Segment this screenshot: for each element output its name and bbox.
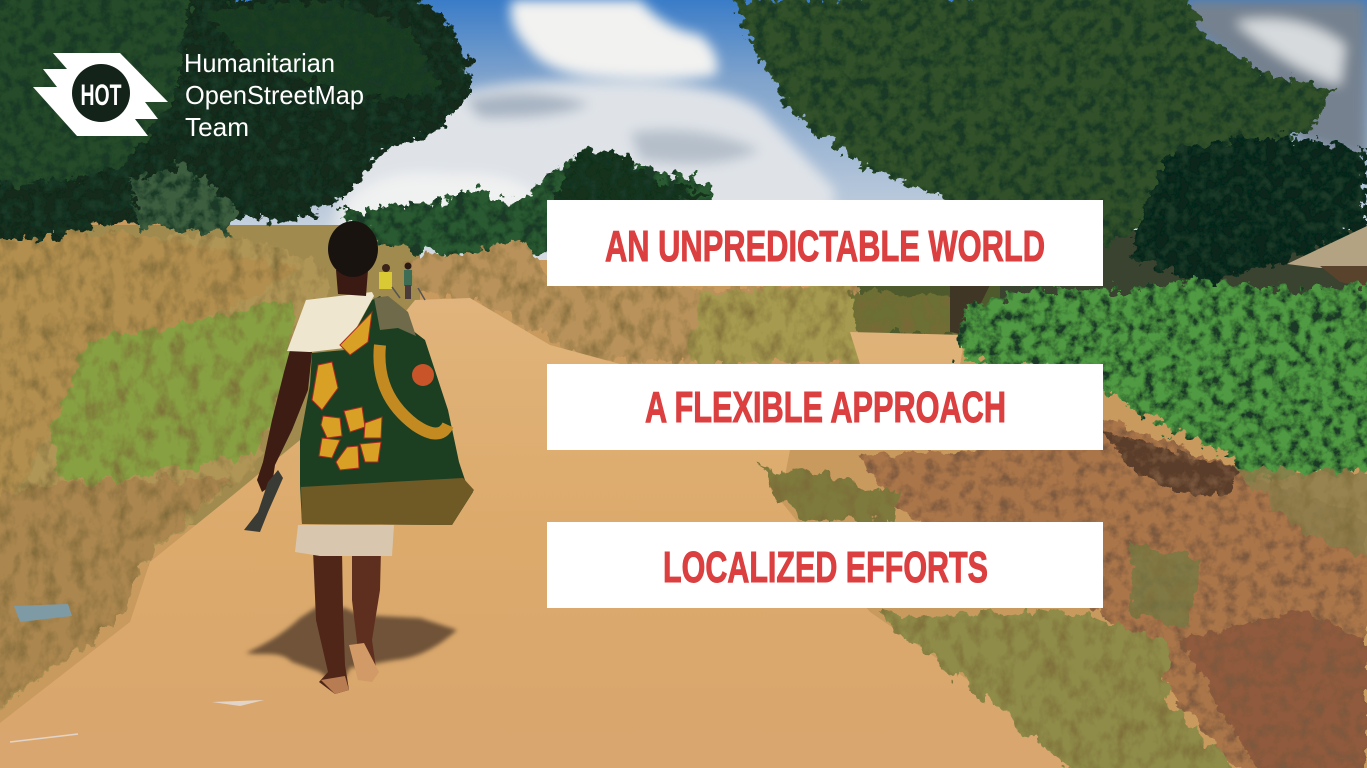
cloth pattern medallion — [379, 345, 448, 434]
mounds of red soil — [860, 415, 1367, 768]
logo mark — [33, 53, 168, 136]
logo circle — [72, 64, 130, 122]
ground base behind vegetation — [0, 225, 1367, 525]
left roadside grass — [0, 225, 330, 715]
right big tree canopy — [732, 0, 1367, 285]
panel: localized efforts — [547, 522, 1103, 608]
left tree canopy — [0, 0, 475, 240]
panel: a flexible approach — [547, 364, 1103, 450]
HOT logo — [33, 48, 364, 142]
road — [0, 298, 1095, 768]
organisation name: OpenStreetMap — [185, 80, 364, 110]
tree trunk and thatched hut — [950, 226, 1367, 335]
skirt — [295, 525, 394, 556]
tool in hand — [244, 470, 283, 532]
distant figures with bicycle — [379, 262, 425, 300]
left arm and hand — [257, 350, 312, 492]
girl's shadow on the road — [246, 605, 457, 688]
small litter on the road edge — [10, 604, 264, 742]
panel: a flexible approach: A FLEXIBLE APPROACH — [645, 383, 1006, 432]
girl walking — [244, 221, 474, 694]
cassava field — [960, 280, 1367, 480]
panel: an unpredictable world: AN UNPREDICTABLE WORLD — [605, 222, 1045, 271]
organisation name — [184, 48, 364, 142]
legs and feet — [313, 550, 381, 694]
green wrap cloth — [300, 296, 473, 525]
logo letters: HOT — [80, 79, 122, 112]
yellow petals — [312, 312, 382, 470]
panel: an unpredictable world — [547, 200, 1103, 286]
white shirt — [287, 292, 374, 352]
patterned hem — [301, 478, 474, 525]
sky with clouds — [180, 0, 1367, 260]
far field grass — [405, 240, 960, 365]
head — [328, 221, 378, 296]
roadside weeds — [755, 465, 1367, 768]
organisation name: Team — [185, 112, 249, 142]
panel: localized efforts: LOCALIZED EFFORTS — [663, 543, 988, 592]
distant tree line — [340, 148, 712, 262]
organisation name: Humanitarian — [184, 48, 335, 78]
patterned shoulder fold — [374, 296, 416, 336]
